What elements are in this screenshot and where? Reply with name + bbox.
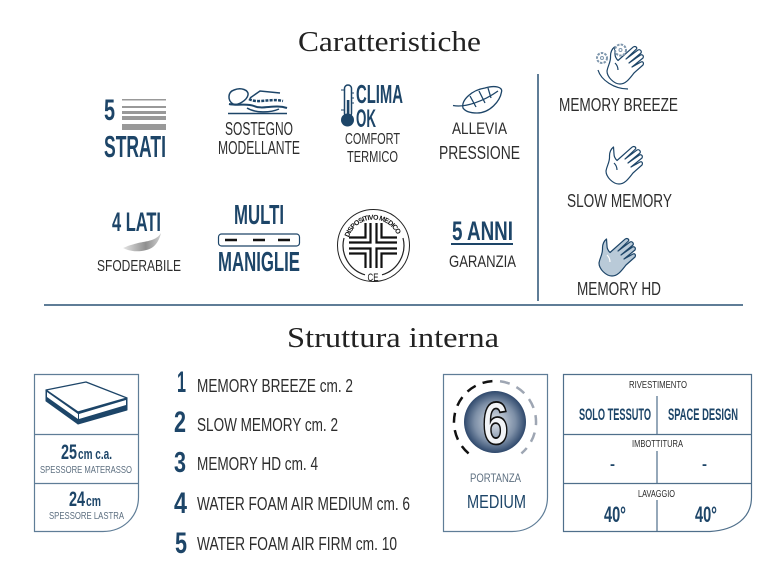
panel: spessore: cm c.a. bbox=[78, 446, 112, 463]
icon: feather bbox=[453, 87, 502, 113]
badge: number 6 bbox=[464, 390, 526, 457]
panel: spessore bbox=[34, 374, 138, 532]
feature: 5 strati: STRATI bbox=[104, 129, 166, 164]
panel: rivestimento, imbottitura, lavaggio: - bbox=[702, 456, 707, 473]
feature: memory hd bbox=[577, 239, 661, 299]
feature: allevia pressione: ALLEVIA bbox=[452, 119, 508, 138]
panel: rivestimento, imbottitura, lavaggio: 40° bbox=[604, 502, 626, 527]
icon: thermometer bbox=[341, 85, 354, 126]
seal: dispositivo medico bbox=[337, 209, 410, 284]
list: strati interni: 5 bbox=[175, 527, 187, 560]
list: strati interni: MEMORY BREEZE cm. 2 bbox=[197, 376, 353, 396]
heading: Struttura interna: Struttura interna bbox=[287, 322, 499, 354]
feature: 5 anni garanzia bbox=[449, 216, 517, 271]
seal: dispositivo medico: DISPOSITIVO MEDICO bbox=[344, 214, 400, 238]
icon: peeled cover bbox=[123, 233, 161, 251]
panel: rivestimento, imbottitura, lavaggio: LAVAGGIO bbox=[638, 489, 675, 500]
panel: rivestimento, imbottitura, lavaggio: - bbox=[610, 456, 615, 473]
panel: spessore: SPESSORE LASTRA bbox=[49, 511, 124, 522]
panel: portanza: PORTANZA bbox=[470, 471, 521, 485]
panel: rivestimento, imbottitura, lavaggio bbox=[564, 374, 752, 532]
list: strati interni: WATER FOAM AIR FIRM cm. 10 bbox=[197, 534, 397, 554]
panel: rivestimento, imbottitura, lavaggio: RIVESTIMENTO bbox=[629, 380, 687, 391]
feature: clima ok bbox=[341, 79, 403, 166]
feature: 5 anni garanzia: 5 ANNI bbox=[452, 216, 513, 246]
feature: clima ok: OK bbox=[356, 105, 376, 133]
feature: clima ok: CLIMA bbox=[356, 79, 403, 109]
icon: mattress bbox=[46, 382, 127, 424]
gauge: dashed ring bbox=[454, 381, 536, 453]
feature: multi maniglie: MANIGLIE bbox=[218, 246, 300, 277]
badge: number 6: 6 bbox=[482, 390, 508, 457]
feature: sostegno modellante: SOSTEGNO bbox=[225, 119, 293, 139]
feature: multi maniglie bbox=[218, 199, 300, 277]
feature: 5 strati bbox=[104, 94, 166, 164]
panel: rivestimento, imbottitura, lavaggio: 40° bbox=[695, 502, 717, 527]
feature: slow memory: SLOW MEMORY bbox=[567, 191, 672, 211]
list: strati interni: SLOW MEMORY cm. 2 bbox=[197, 415, 338, 435]
panel: portanza bbox=[444, 374, 548, 532]
list: strati interni: MEMORY HD cm. 4 bbox=[197, 454, 318, 474]
seal: dispositivo medico: CE bbox=[368, 272, 378, 284]
feature: 4 lati sfoderabile: 4 LATI bbox=[112, 207, 161, 237]
feature: allevia pressione bbox=[439, 87, 520, 163]
feature: clima ok: TERMICO bbox=[347, 149, 398, 166]
list: strati interni: 2 bbox=[174, 406, 186, 439]
panel: spessore: 25 bbox=[61, 441, 77, 464]
panel: spessore: 24 bbox=[69, 488, 85, 511]
list: strati interni: WATER FOAM AIR MEDIUM cm. 6 bbox=[197, 494, 410, 514]
feature: multi maniglie: MULTI bbox=[234, 199, 284, 230]
list: strati interni bbox=[174, 366, 410, 560]
panel: spessore: cm bbox=[86, 493, 101, 510]
list: strati interni: 3 bbox=[174, 447, 186, 479]
panel: rivestimento, imbottitura, lavaggio: IMBOTTITURA bbox=[632, 439, 683, 450]
feature: sostegno modellante: MODELLANTE bbox=[218, 138, 300, 158]
icon: handles bbox=[218, 234, 300, 246]
panel: rivestimento, imbottitura, lavaggio: SOLO TESSUTO bbox=[579, 405, 651, 424]
feature: 4 lati sfoderabile: SFODERABILE bbox=[97, 258, 181, 275]
feature: memory breeze bbox=[559, 44, 678, 115]
feature: slow memory bbox=[567, 147, 672, 211]
feature: memory hd: MEMORY HD bbox=[577, 279, 661, 299]
title: Caratteristiche: Caratteristiche bbox=[298, 26, 481, 58]
panel: spessore: SPESSORE MATERASSO bbox=[40, 465, 132, 476]
icon: filled hand bbox=[599, 239, 635, 276]
feature: 5 anni garanzia: GARANZIA bbox=[449, 252, 517, 271]
icon: hand bbox=[607, 47, 643, 84]
icon: sleeper on mattress bbox=[228, 89, 287, 114]
icon: hand bbox=[606, 147, 642, 184]
icon: flowers bbox=[597, 44, 626, 63]
feature: 4 lati sfoderabile bbox=[97, 207, 181, 275]
feature: memory breeze: MEMORY BREEZE bbox=[559, 95, 678, 115]
list: strati interni: 1 bbox=[177, 366, 186, 399]
feature: sostegno modellante bbox=[218, 89, 300, 158]
feature: 5 strati: 5 bbox=[104, 94, 115, 127]
feature: clima ok: COMFORT bbox=[345, 131, 400, 148]
feature: allevia pressione: PRESSIONE bbox=[439, 143, 520, 163]
panel: portanza: MEDIUM bbox=[467, 492, 526, 512]
list: strati interni: 4 bbox=[174, 487, 187, 520]
